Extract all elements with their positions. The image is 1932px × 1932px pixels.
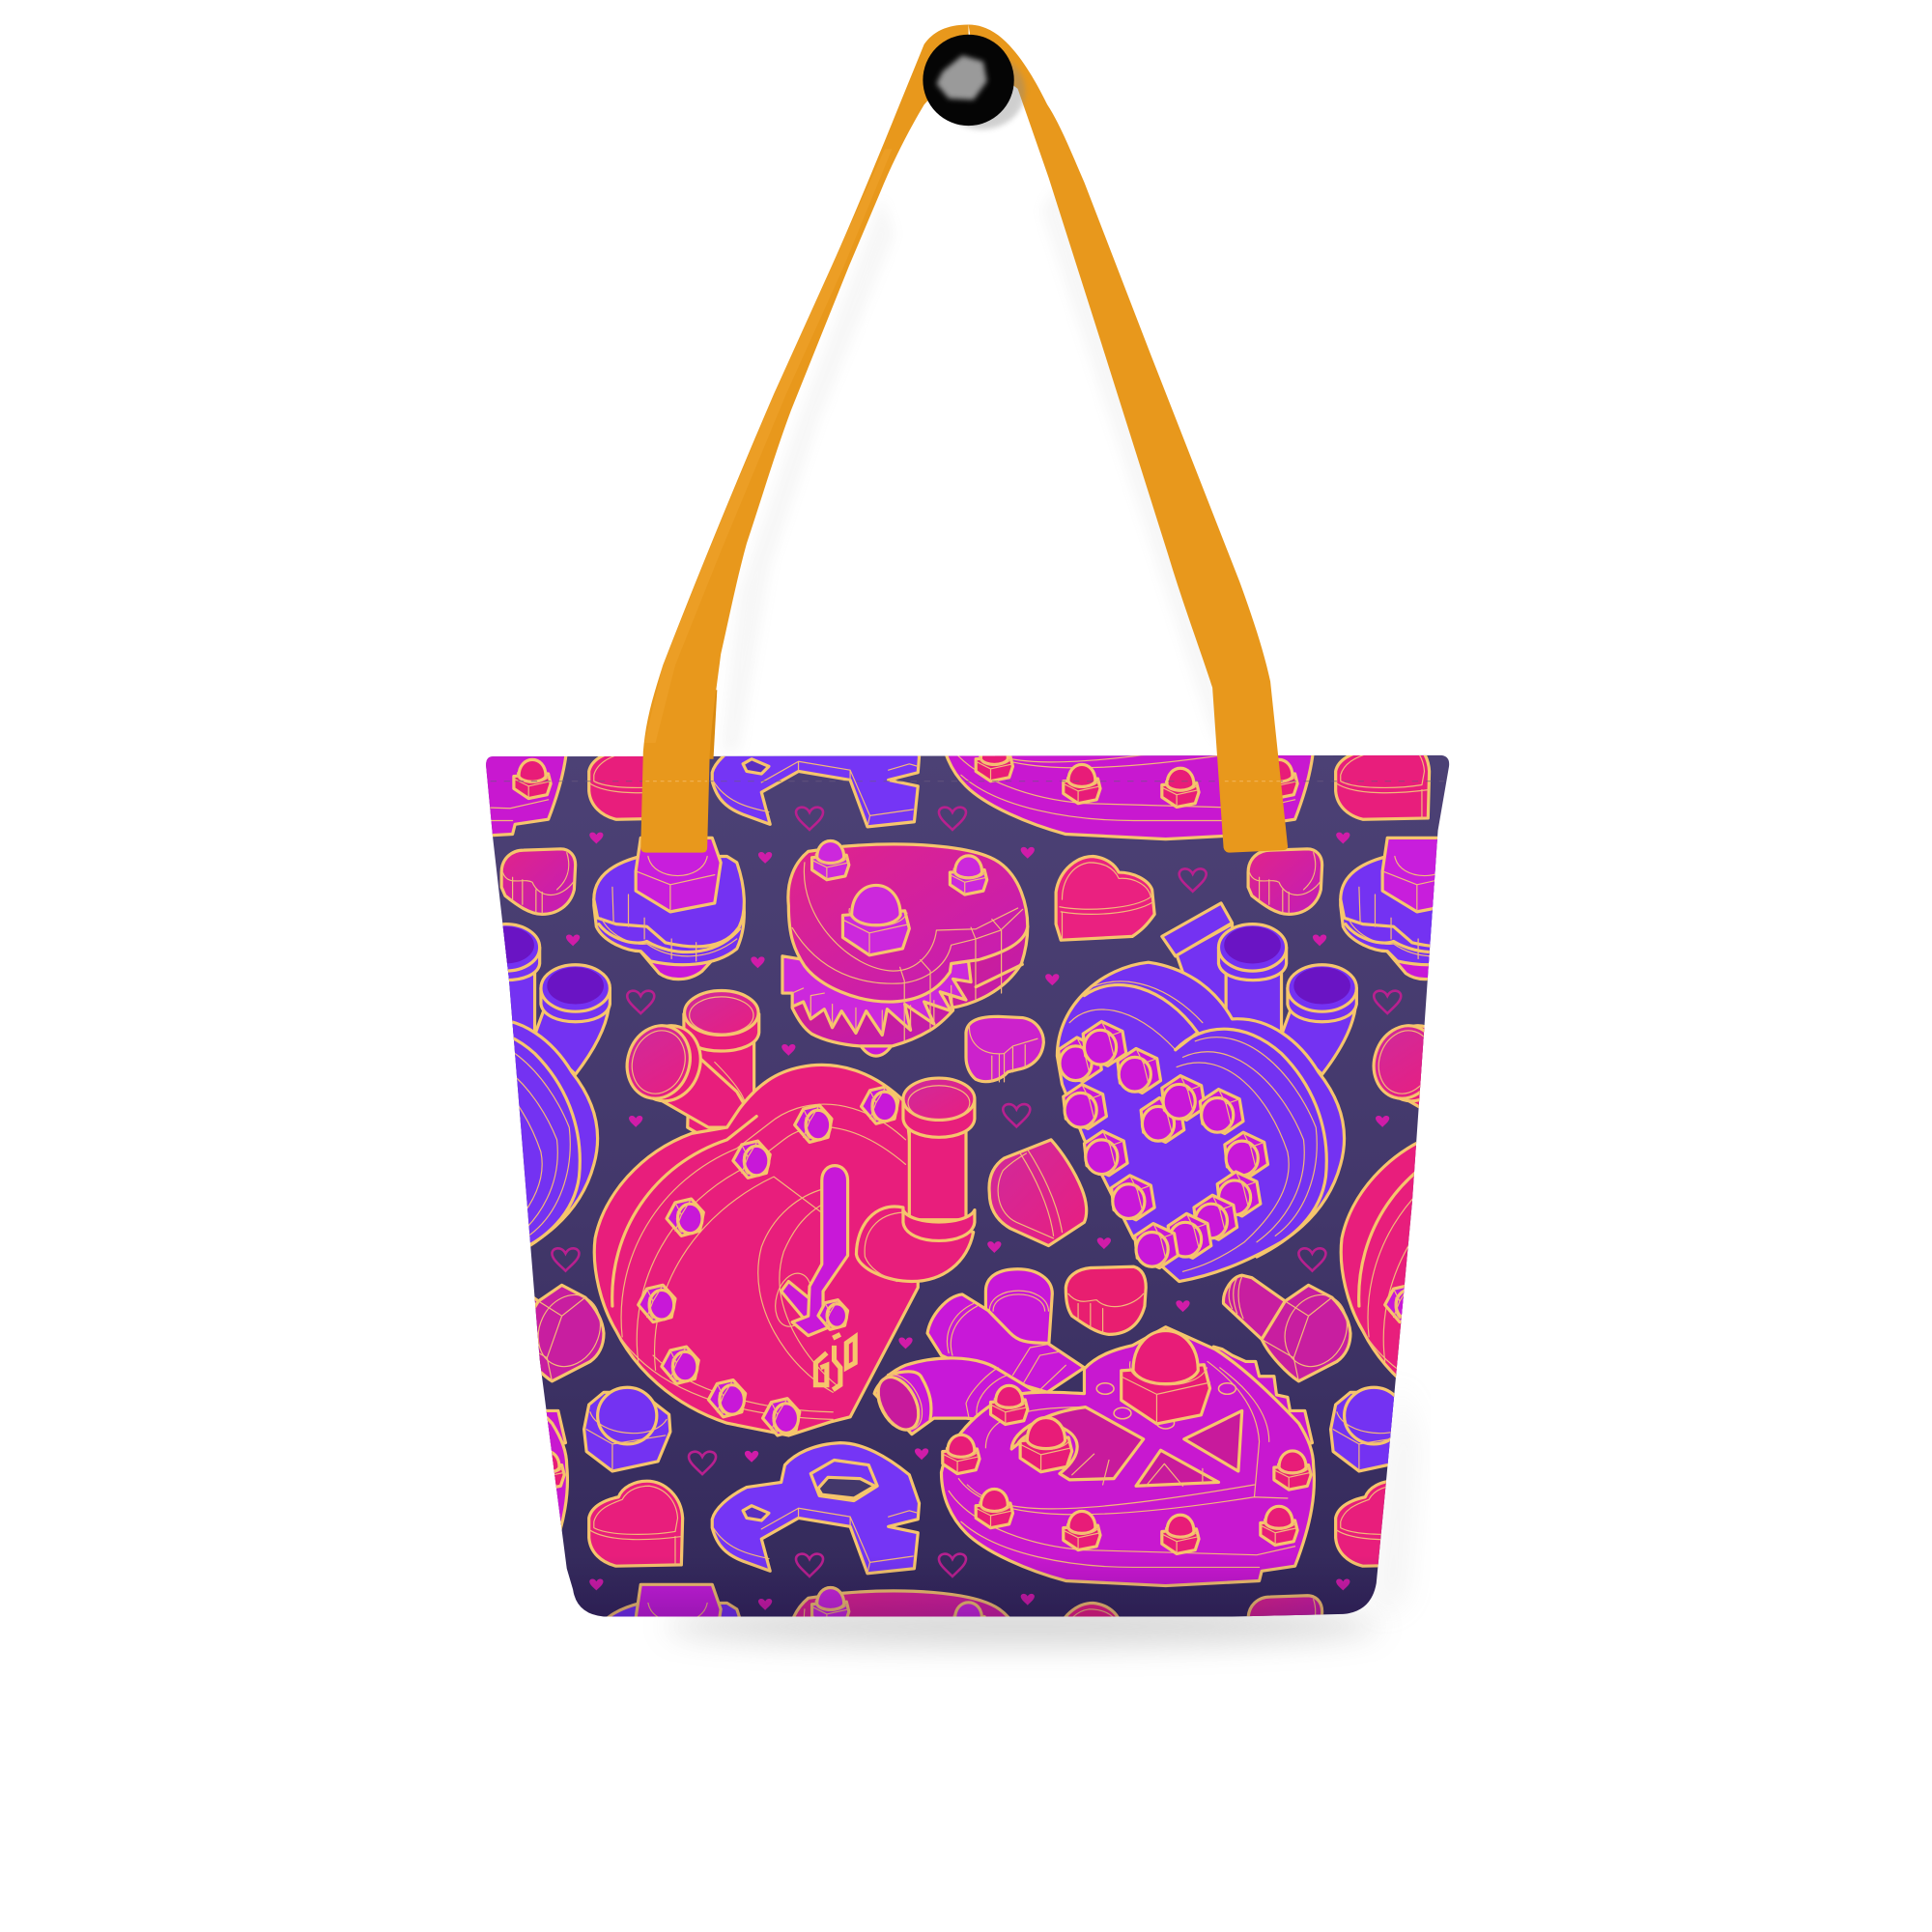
- printed pattern: [486, 25, 1437, 1617]
- icon: violet dome nut: [584, 1387, 670, 1471]
- icon: violet machine heart: [1057, 903, 1356, 1282]
- red cap nuts: [943, 1331, 1311, 1553]
- pipes: [869, 1269, 1084, 1437]
- pattern repeats at the right edge: [1248, 838, 1721, 1566]
- icon: pink machine heart: [594, 991, 975, 1435]
- layer lines: [599, 887, 739, 961]
- gear edge: [1213, 1347, 1312, 1448]
- pipes behind the violet heart: [1162, 903, 1356, 1074]
- flange lines: [612, 1104, 906, 1419]
- hex hole: [810, 1460, 877, 1501]
- magenta under layer: [639, 949, 717, 980]
- strap stitching: [645, 781, 1284, 782]
- pattern repeats at the top edge: [123, 523, 1430, 839]
- small hex hole: [743, 1506, 769, 1520]
- icon: bottom magenta heart with pipes: [869, 1269, 1314, 1586]
- pattern repeats at the left edge: [123, 903, 611, 1586]
- icon: wrench: [712, 1443, 920, 1574]
- plate lines: [949, 1361, 1295, 1567]
- bag fabric: [486, 755, 1449, 1616]
- heart body: [1057, 962, 1345, 1282]
- flange lines: [1069, 981, 1326, 1271]
- bag shadow: [666, 1380, 1417, 1646]
- heart body: [788, 844, 1028, 1002]
- strap: [640, 25, 1288, 853]
- icon: threaded bolt: [1223, 1275, 1358, 1381]
- strap shadow: [721, 185, 1233, 752]
- lower tier: [952, 926, 1028, 1008]
- icon: wall knob: [923, 35, 1025, 129]
- icon: pink heart box lower left: [589, 1481, 683, 1566]
- icon: magenta heart box: [966, 1016, 1043, 1082]
- left strap: [640, 25, 969, 853]
- icon: tilted heart box: [989, 1140, 1087, 1246]
- bolt holes: [1096, 1383, 1236, 1429]
- icon: geared heart with cap nuts: [782, 841, 1028, 1056]
- right strap: [969, 25, 1288, 853]
- bottom shading: [469, 739, 1466, 1627]
- ring of magenta hex bolts: [1059, 1021, 1267, 1267]
- gear teeth: [782, 956, 971, 1035]
- back of strap: [705, 690, 717, 759]
- cap nuts: [812, 841, 987, 955]
- large nut: [636, 838, 721, 912]
- icon: logo mark: [815, 1334, 855, 1390]
- icon: small heart box upper left: [501, 849, 576, 914]
- left strap lit edge: [644, 149, 892, 743]
- window cut-outs: [1011, 1407, 1242, 1486]
- panel: tote bag body: [486, 755, 1449, 1617]
- heart body: [941, 1327, 1314, 1586]
- lever: [770, 1166, 848, 1336]
- bottom dome: [860, 1045, 892, 1056]
- small outline hearts: [552, 808, 1401, 1577]
- hex bolts on pink heart: [639, 1087, 898, 1435]
- heart body: [594, 1065, 918, 1435]
- pipes behind the pink heart: [618, 991, 759, 1140]
- icon: red heart box: [1065, 1266, 1146, 1334]
- icon: pink heart box: [1056, 856, 1154, 940]
- pattern repeats at the bottom edge: [501, 1584, 1491, 1803]
- elbow pipe: [856, 1078, 975, 1282]
- hem stitching: [491, 781, 1444, 782]
- icon: violet stacked heart with nut: [594, 838, 744, 980]
- small solid hearts: [566, 833, 1389, 1610]
- top face edge: [792, 863, 1023, 1041]
